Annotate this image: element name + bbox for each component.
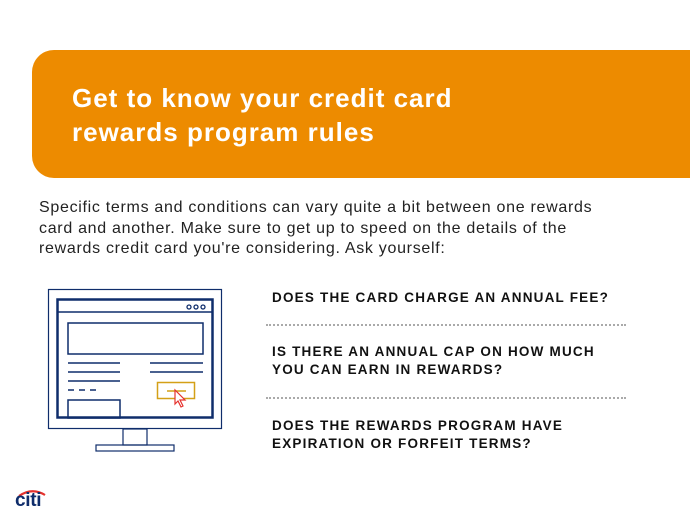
question 3: EXPIRATION OR FORFEIT TERMS? [272,436,532,451]
title: rewards program rules [72,117,375,147]
question 2: IS THERE AN ANNUAL CAP ON HOW MUCH [272,344,595,359]
question 3: DOES THE REWARDS PROGRAM HAVE [272,418,563,433]
logo: citi: citi [15,490,41,511]
question 2: YOU CAN EARN IN REWARDS? [272,362,503,377]
intro text: Specific terms and conditions can vary quite a bit between one rewards card and another. Make sure to get up to speed on the details of the rewards credit card you're considering. Ask yourself: [39,199,592,257]
question 1: DOES THE CARD CHARGE AN ANNUAL FEE? [272,290,609,305]
question 2 [272,344,595,377]
header banner [32,50,690,178]
title: Get to know your credit card [72,83,453,113]
title [72,83,453,147]
question 3 [272,418,563,451]
